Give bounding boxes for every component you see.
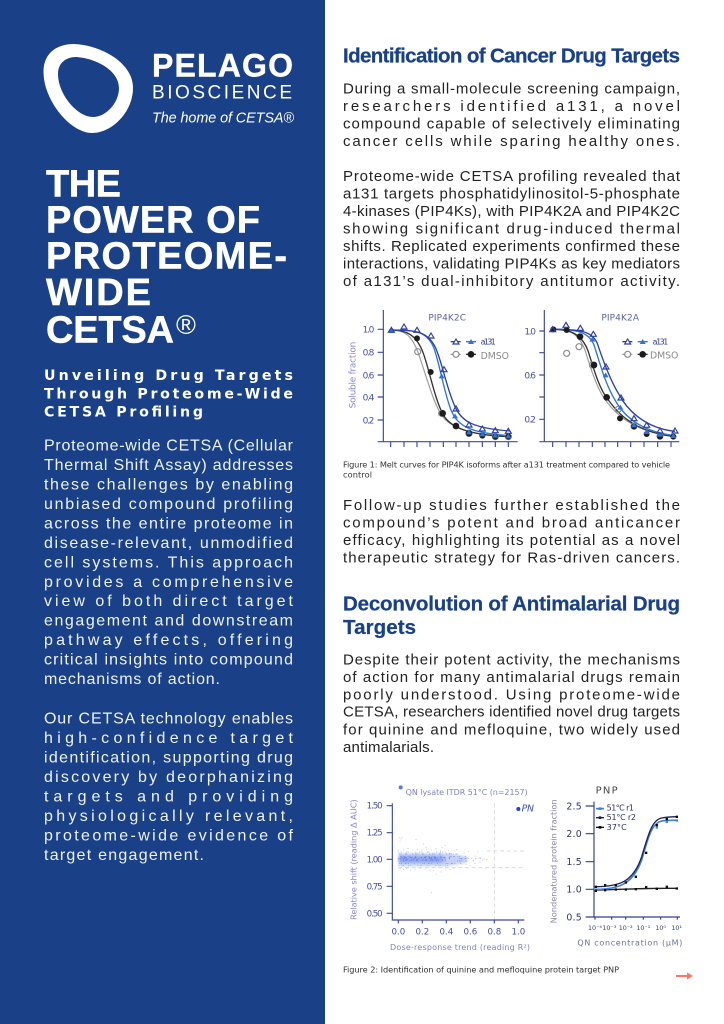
text block: follow-up studies: therapeutic strategy for Ras-driven cancers. <box>343 550 680 567</box>
text block: follow-up studies: Follow-up studies further established the <box>343 497 680 514</box>
chart: PIP4K2C melt curve: a131 <box>481 338 496 347</box>
text block: intro paragraph: these challenges by enabling <box>44 477 293 494</box>
text block: follow-up studies: compound’s potent and broad anticancer <box>343 515 680 532</box>
text block: intro paragraph: Proteome-wide CETSA (Cellular <box>44 438 294 455</box>
chart: PNP dose-response curves: 37°C <box>607 823 627 832</box>
chart: QN lysate scatter plot: Relative shift (reading Δ AUC) <box>349 799 359 920</box>
left panel <box>0 0 325 1024</box>
title: CETSA <box>46 310 174 352</box>
text block: intro paragraph: pathway effects, offering <box>44 632 293 649</box>
title: PROTEOME- <box>46 236 287 278</box>
icon: logo ring <box>44 44 133 133</box>
chart: PNP dose-response curves: 0.5 <box>566 912 582 923</box>
heading: Identification of Cancer Drug Targets: Identification of Cancer Drug Targets <box>343 44 680 67</box>
text block: antimalarial paragraph: for quinine and mefloquine, two widely used <box>343 721 680 738</box>
text block: antimalarial paragraph: poorly understood. Using proteome-wide <box>343 686 680 703</box>
text block: technology paragraph: proteome-wide evidence of <box>44 827 294 844</box>
logo subword: BIOSCIENCE <box>152 83 292 104</box>
text block: antimalarial paragraph: antimalarials. <box>343 739 434 756</box>
chart: QN lysate scatter plot: 0.2 <box>415 927 429 937</box>
text block: antimalarial paragraph: CETSA, researchers identified novel drug targets <box>343 704 680 721</box>
chart: PIP4K2C melt curve: 1.0 <box>363 326 375 336</box>
text block: intro paragraph: engagement and downstream <box>44 613 293 630</box>
text block: antimalarial paragraph: of action for many antimalarial drugs remain <box>343 669 680 686</box>
chart: PNP dose-response curves: 51°C r2 <box>607 813 636 822</box>
chart: PIP4K2C melt curve <box>348 310 518 447</box>
text block: intro paragraph: cell systems. This approach <box>44 554 293 571</box>
text block: intro paragraph: provides a comprehensive <box>44 574 293 591</box>
chart: QN lysate scatter plot: 1.25 <box>367 829 383 839</box>
text block: antimalarial paragraph <box>343 651 680 756</box>
text block: CETSA profiling result: a131 targets phosphatidylinositol-5-phosphate <box>343 186 680 202</box>
chart: PNP dose-response curves: Nondenatured protein fraction <box>549 799 559 923</box>
text block: intro paragraph: unbiased compound profiling <box>44 496 293 513</box>
logo tagline: The home of CETSA® <box>152 111 294 127</box>
text block: intro paragraph: view of both direct target <box>44 593 294 610</box>
chart: PNP dose-response curves: 2.5 <box>566 801 582 812</box>
subtitle <box>44 368 293 421</box>
chart: PIP4K2C melt curve: 0.6 <box>363 371 375 381</box>
chart: PIP4K2C melt curve: DMSO <box>481 351 509 362</box>
chart: QN lysate scatter plot: 1.0 <box>511 927 525 937</box>
text block: screening campaign: During a small-molecule screening campaign, <box>343 80 680 97</box>
text block: CETSA profiling result: 4-kinases (PIP4Ks), with PIP4K2A and PIP4K2C <box>343 203 680 220</box>
chart: PIP4K2A melt curve: 0.6 <box>524 371 536 381</box>
text block: CETSA profiling result: of a131’s dual-inhibitory antitumor activity. <box>343 273 680 290</box>
chart: QN lysate scatter plot: 0.75 <box>367 882 383 892</box>
subtitle: Unveiling Drug Targets <box>44 368 293 384</box>
scatter points <box>399 838 487 893</box>
text block: technology paragraph: discovery by deorphanizing <box>44 769 293 786</box>
text block: technology paragraph: target engagement. <box>44 847 204 864</box>
title: WIDE <box>46 272 151 314</box>
text block: intro paragraph <box>44 438 294 688</box>
chart: PIP4K2A melt curve: 1.0 <box>524 327 536 337</box>
chart: PNP dose-response curves: 51°C r1 <box>607 804 634 813</box>
chart: PIP4K2A melt curve: a131 <box>653 338 668 347</box>
figure 1 caption: Figure 1: Melt curves for PIP4K isoforms after a131 treatment compared to vehicle <box>343 460 670 470</box>
chart: PNP dose-response curves: QN concentration (µM) <box>577 939 682 948</box>
chart: PNP dose-response curves: PNP <box>596 785 618 796</box>
chart: QN lysate scatter plot: PN <box>522 804 534 815</box>
heading: Deconvolution of Antimalarial Drug Targets: Deconvolution of Antimalarial Drug <box>343 593 680 616</box>
chart: PNP dose-response curves: 10¹ <box>671 925 682 932</box>
chart: PNP dose-response curves: 2.0 <box>566 829 582 840</box>
chart: PNP dose-response curves: 10⁻³ <box>602 925 617 932</box>
text block: intro paragraph: Thermal Shift Assay) addresses <box>44 457 293 474</box>
text block: screening campaign: cancer cells while sparing healthy ones. <box>343 133 680 150</box>
text block: antimalarial paragraph: Despite their potent activity, the mechanisms <box>343 651 680 668</box>
chart: PIP4K2C melt curve: 0.4 <box>363 393 375 403</box>
text block: follow-up studies <box>343 497 680 567</box>
arrow: next page <box>676 972 693 980</box>
chart: QN lysate scatter plot: 0.6 <box>463 927 477 937</box>
text block: intro paragraph: mechanisms of action. <box>44 671 220 688</box>
title: POWER OF <box>46 200 260 242</box>
text block: CETSA profiling result: interactions, validating PIP4Ks as key mediators <box>343 256 680 272</box>
chart: PIP4K2C melt curve: Soluble fraction <box>348 342 358 408</box>
text block: CETSA profiling result: showing significant drug-induced thermal <box>343 220 680 238</box>
chart: PNP dose-response curves: 10⁻² <box>619 925 633 932</box>
text block: technology paragraph: high-confidence target <box>44 730 294 747</box>
chart: PIP4K2C melt curve: 0.2 <box>363 416 374 426</box>
chart: PIP4K2C melt curve: 0.8 <box>363 349 375 359</box>
chart: QN lysate scatter plot: QN lysate ITDR 51°C (n=2157) <box>406 788 528 797</box>
text block: intro paragraph: critical insights into compound <box>44 652 293 668</box>
chart: PNP dose-response curves: 10⁻¹ <box>636 925 651 932</box>
chart: PIP4K2A melt curve: PIP4K2A <box>601 314 640 324</box>
chart: QN lysate scatter plot: 0.4 <box>439 927 454 937</box>
chart: PIP4K2A melt curve: 0.2 <box>524 416 536 426</box>
figure 1 caption <box>343 460 670 480</box>
chart: QN lysate scatter plot: 1.50 <box>367 802 383 812</box>
chart: QN lysate scatter plot: 0.8 <box>487 927 501 937</box>
chart: QN lysate scatter plot: 1.00 <box>367 855 383 865</box>
text block: intro paragraph: disease-relevant, unmodified <box>44 535 293 552</box>
text block: screening campaign <box>343 80 680 150</box>
logo: Pelago Bioscience <box>44 44 294 133</box>
chart: PNP dose-response curves: 1.5 <box>566 857 582 868</box>
text block: intro paragraph: across the entire proteome in <box>44 516 293 532</box>
subtitle: Through Proteome-Wide <box>44 386 293 402</box>
text block: CETSA profiling result <box>343 168 681 290</box>
chart: QN lysate scatter plot: Dose-response trend (reading R²) <box>390 943 530 952</box>
chart: PNP dose-response curves <box>549 785 682 948</box>
chart: QN lysate scatter plot <box>349 785 534 952</box>
title <box>46 164 287 352</box>
chart: PNP dose-response curves: 10⁰ <box>655 925 666 932</box>
text block: screening campaign: compound capable of selectively eliminating <box>343 116 680 132</box>
text block: technology paragraph <box>44 710 294 864</box>
title: THE <box>46 164 121 206</box>
chart: QN lysate scatter plot: 0.50 <box>367 909 383 919</box>
figure 2 caption: Figure 2: Identification of quinine and mefloquine protein target PNP <box>343 965 619 975</box>
text block: CETSA profiling result: Proteome-wide CETSA profiling revealed that <box>343 168 681 185</box>
chart: QN lysate scatter plot: 0.0 <box>391 927 405 937</box>
heading: Deconvolution of Antimalarial Drug Targets: Targets <box>343 616 416 639</box>
chart: PIP4K2A melt curve <box>524 310 679 447</box>
text block: technology paragraph: targets and providing <box>44 788 293 805</box>
figure 1: melt curves <box>348 310 679 447</box>
figure 1 caption: control <box>343 470 372 480</box>
chart: PIP4K2C melt curve: PIP4K2C <box>428 314 466 324</box>
text block: technology paragraph: Our CETSA technology enables <box>44 710 293 727</box>
text block: screening campaign: researchers identified a131, a novel <box>343 98 680 115</box>
chart: PIP4K2A melt curve: DMSO <box>650 350 678 361</box>
chart: PNP dose-response curves: 1.0 <box>566 885 582 896</box>
text block: technology paragraph: identification, supporting drug <box>44 749 293 766</box>
figure 2: ITDR scatter and PNP curves <box>349 785 682 952</box>
logo wordmark: PELAGO <box>152 48 293 84</box>
subtitle: CETSA Profiling <box>44 405 203 421</box>
chart: PNP dose-response curves: 10⁻⁴ <box>588 925 602 932</box>
text block: technology paragraph: physiologically relevant, <box>44 808 293 825</box>
heading: Deconvolution of Antimalarial Drug Targets <box>343 593 680 639</box>
title: ® <box>176 310 196 340</box>
text block: follow-up studies: efficacy, highlighting its potential as a novel <box>343 532 680 549</box>
text block: CETSA profiling result: shifts. Replicated experiments confirmed these <box>343 238 680 255</box>
